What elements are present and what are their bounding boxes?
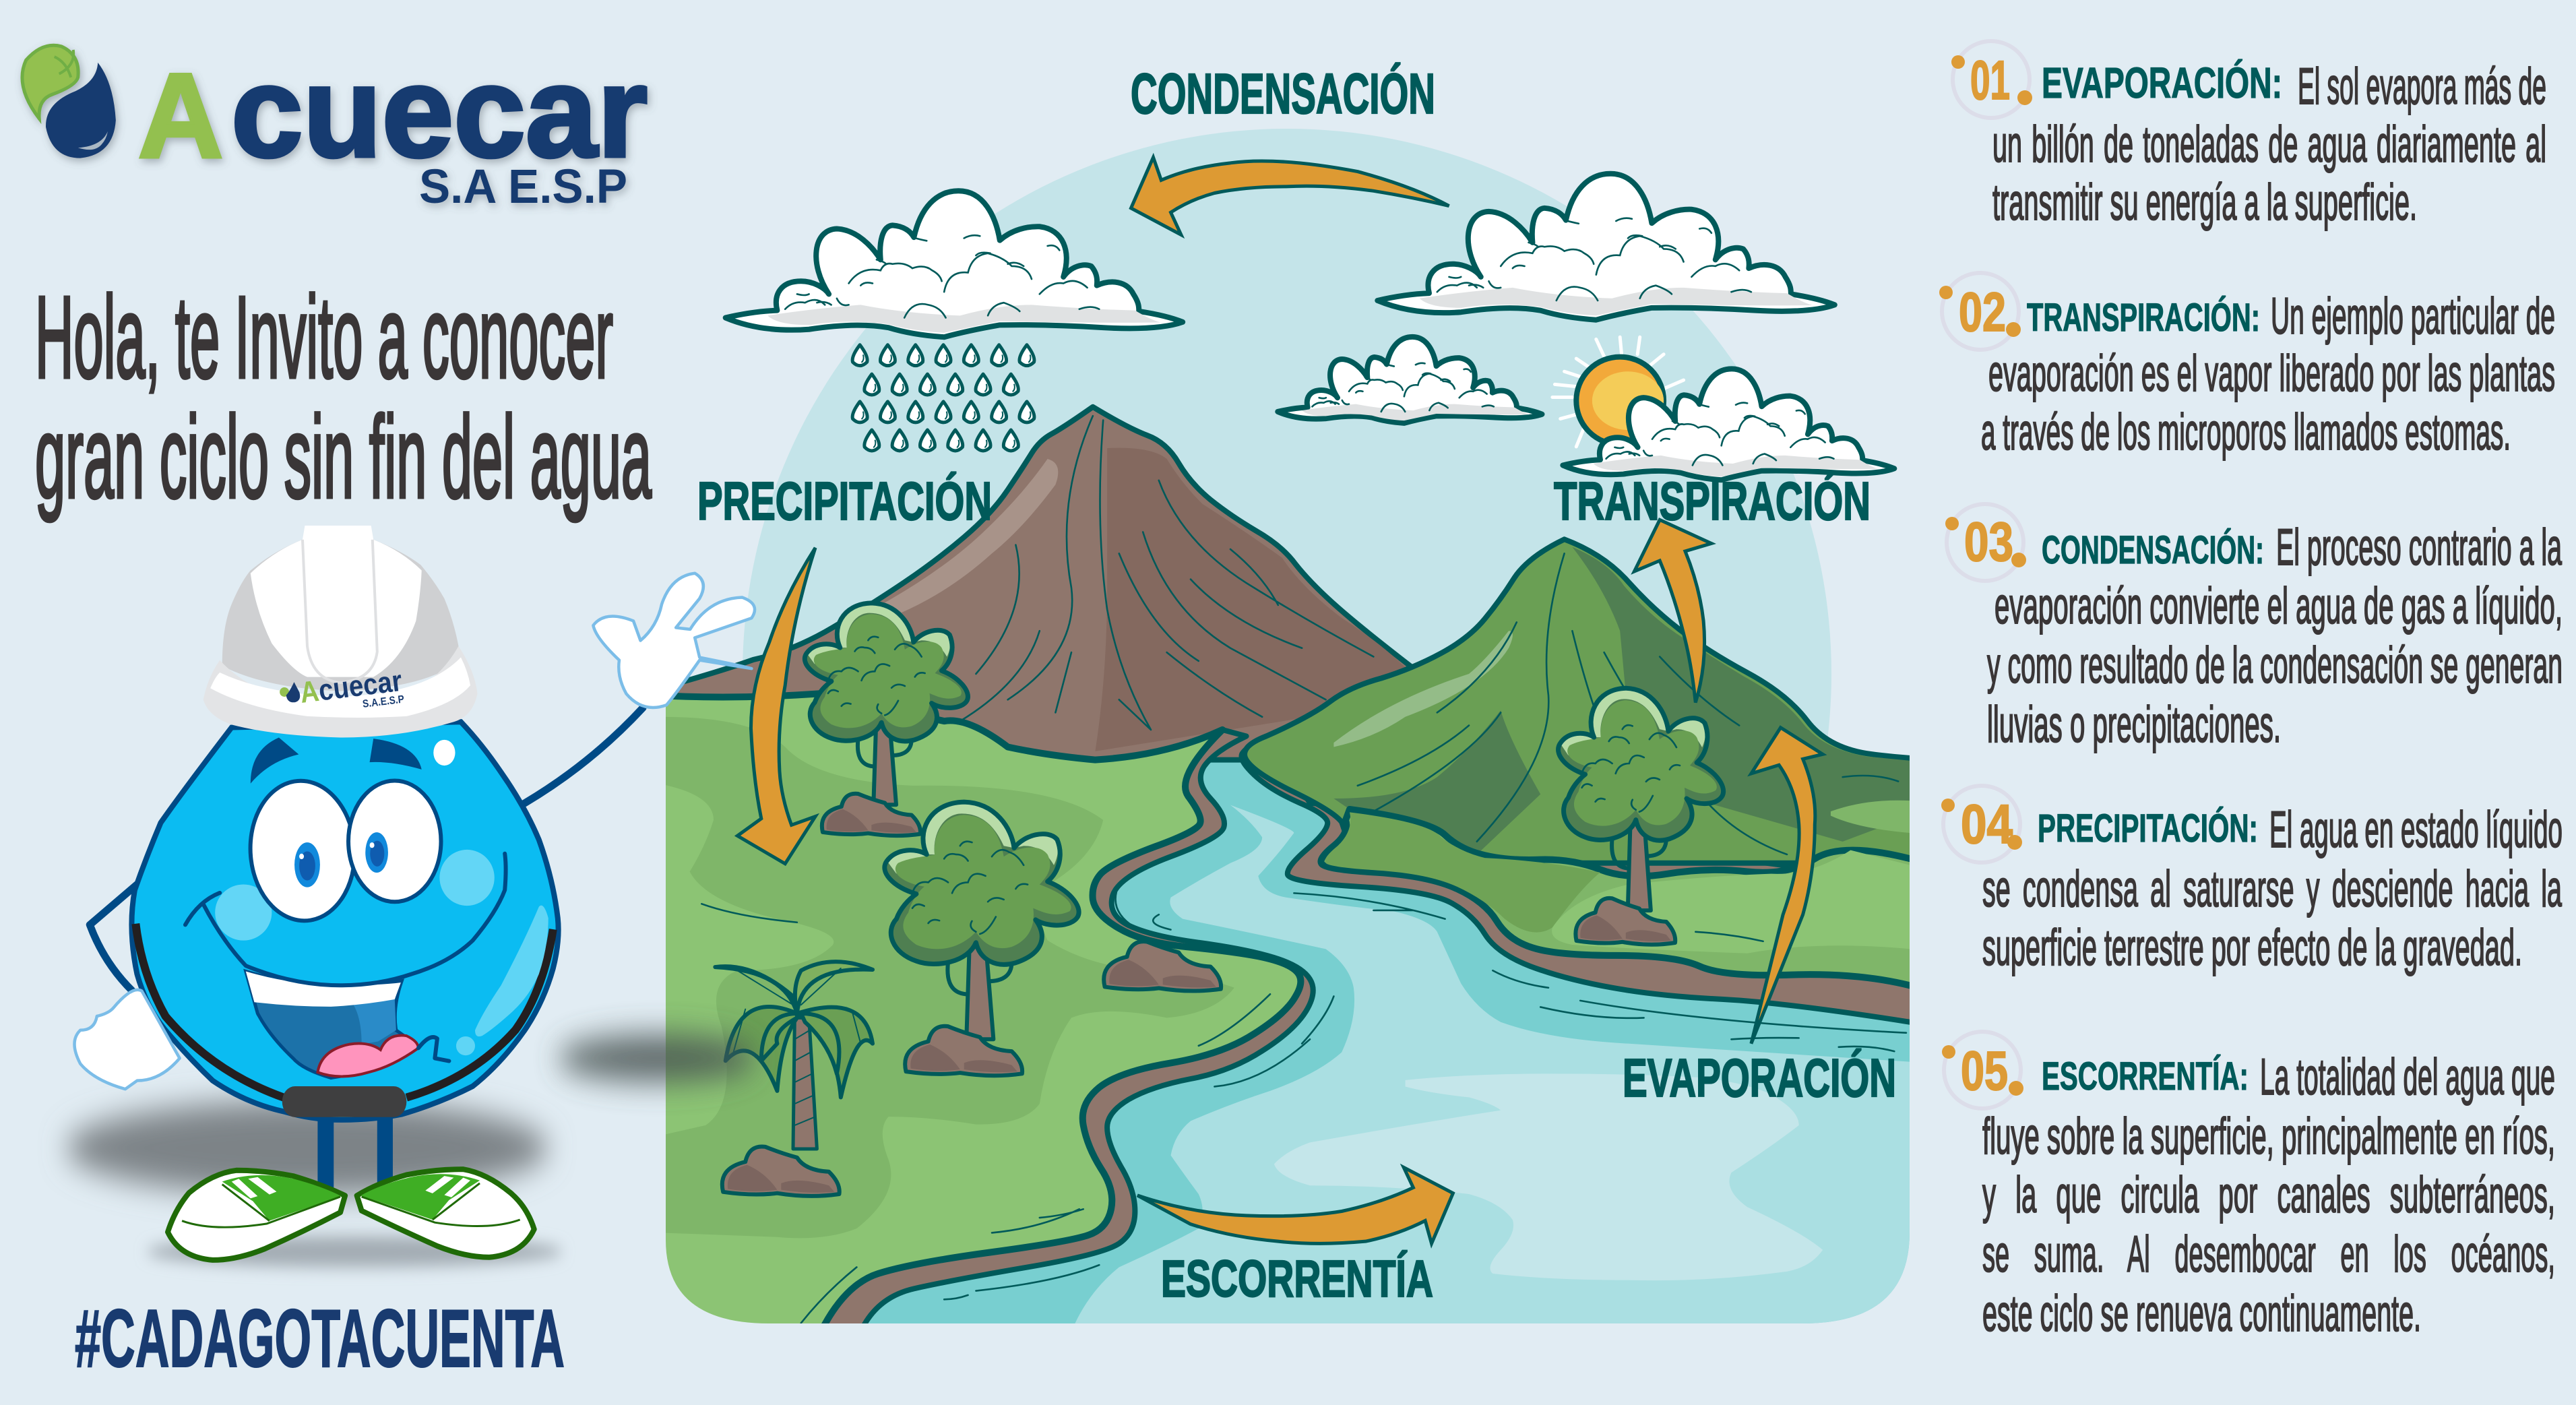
step 04 heading: PRECIPITACIÓN: xyxy=(2038,807,2258,850)
label: condensación: CONDENSACIÓN xyxy=(1131,62,1435,125)
mascot cheeks xyxy=(215,850,495,941)
arrow: evaporation xyxy=(1751,728,1823,1044)
number badge 02 xyxy=(1939,273,2021,350)
mascot body highlights xyxy=(433,740,548,1055)
step 01 text xyxy=(1992,58,2546,231)
arrow: transpiration xyxy=(1634,520,1711,703)
rock: river side xyxy=(1104,941,1221,991)
step 05 heading: ESCORRENTÍA: xyxy=(2042,1055,2249,1098)
character shadow xyxy=(66,1034,756,1268)
mascot right arm xyxy=(525,708,643,803)
logo wordmark: cuecar xyxy=(231,39,648,184)
step 01 heading: EVAPORACIÓN: xyxy=(2042,59,2282,107)
land: right meadow xyxy=(1321,801,1962,990)
step 04 text xyxy=(1982,801,2563,976)
mascot smile line xyxy=(185,854,506,1061)
mascot body xyxy=(131,722,559,1120)
logo wordmark letter A: A xyxy=(138,49,223,183)
step 03 text xyxy=(1987,519,2563,753)
panel: water cycle landscape xyxy=(634,407,1962,1332)
number badge 01: 01 xyxy=(1970,50,2010,111)
helmet logo: S.A.E.S.P xyxy=(362,693,405,710)
arrow: runoff xyxy=(1137,1167,1453,1243)
label: escorrentía: ESCORRENTÍA xyxy=(1161,1250,1433,1308)
label: evaporación: EVAPORACIÓN xyxy=(1623,1048,1896,1108)
cloud: upper right xyxy=(1377,174,1835,320)
step 02 text xyxy=(1981,288,2555,461)
number badge 02: 02 xyxy=(1959,282,2006,343)
icon: water drop xyxy=(46,63,116,158)
number badge 05 xyxy=(1942,1032,2023,1109)
number badge 04 xyxy=(1941,786,2022,863)
label: transpiración: TRANSPIRACIÓN xyxy=(1554,471,1871,531)
shoe: right xyxy=(357,1169,534,1257)
river water xyxy=(868,763,1910,1323)
number badge 01 xyxy=(1951,41,2032,118)
panel: step 05 escorrentía xyxy=(1942,1032,2555,1342)
helmet logo xyxy=(278,664,405,720)
mascot left arm xyxy=(90,884,137,991)
glove: left hand on hip xyxy=(74,990,180,1089)
cloud: upper left with rain xyxy=(726,191,1183,337)
text: Hola, te Invito a conocer xyxy=(35,272,613,402)
step 03 text: lluvias o precipitaciones. xyxy=(1987,696,2281,753)
sky dome xyxy=(743,129,1831,1219)
mountain: green xyxy=(1245,539,1962,863)
number badge 03: 03 xyxy=(1964,511,2013,573)
mascot legs xyxy=(317,1117,393,1190)
step 05 text xyxy=(1982,1049,2555,1342)
cloud: over sun xyxy=(1563,369,1894,480)
tree: centre xyxy=(885,802,1079,1075)
raindrops xyxy=(852,345,1034,451)
river bank: right xyxy=(1242,737,1962,1031)
tree: upper left xyxy=(805,603,968,836)
arrow: precipitation xyxy=(737,548,815,864)
river bank: left xyxy=(821,730,1313,1332)
mascot eyes xyxy=(243,773,441,929)
helmet logo: Acuecar xyxy=(299,664,404,710)
number badge 03 xyxy=(1945,504,2026,581)
panel: step 04 precipitación xyxy=(1941,786,2563,976)
label: precipitación: PRECIPITACIÓN xyxy=(697,471,992,531)
panel: step 02 transpiración xyxy=(1939,273,2555,461)
number badge 05: 05 xyxy=(1961,1040,2008,1102)
mascot helmet xyxy=(203,526,478,737)
mountain: brown volcano xyxy=(634,407,1437,760)
panel: step 01 evaporación xyxy=(1951,41,2546,231)
title xyxy=(35,272,652,522)
number badge 04: 04 xyxy=(1961,794,2013,855)
cloud: small middle xyxy=(1278,337,1542,423)
text: gran ciclo sin fin del agua xyxy=(35,392,652,522)
panel: step 03 condensación xyxy=(1945,504,2563,753)
mascot belt xyxy=(135,924,553,1117)
tree: right xyxy=(1559,688,1724,945)
logo subtitle: S.A E.S.P xyxy=(419,160,627,214)
icon: leaf xyxy=(22,45,78,119)
hashtag: #CADAGOTACUENTA xyxy=(75,1292,565,1384)
arrow: condensation xyxy=(1131,158,1449,235)
mascot eyebrows xyxy=(251,737,422,784)
shoe: left xyxy=(168,1170,345,1260)
mascot mouth xyxy=(246,971,418,1078)
glove: raised right hand xyxy=(593,573,755,708)
step 02 heading: TRANSPIRACIÓN: xyxy=(2027,296,2260,340)
palm tree xyxy=(715,962,873,1196)
step 03 heading: CONDENSACIÓN: xyxy=(2042,528,2264,572)
logo: Acuecar xyxy=(22,39,648,214)
sun xyxy=(1552,337,1684,447)
land: left meadow xyxy=(658,693,1763,1332)
mascot: water drop character xyxy=(90,526,643,1190)
